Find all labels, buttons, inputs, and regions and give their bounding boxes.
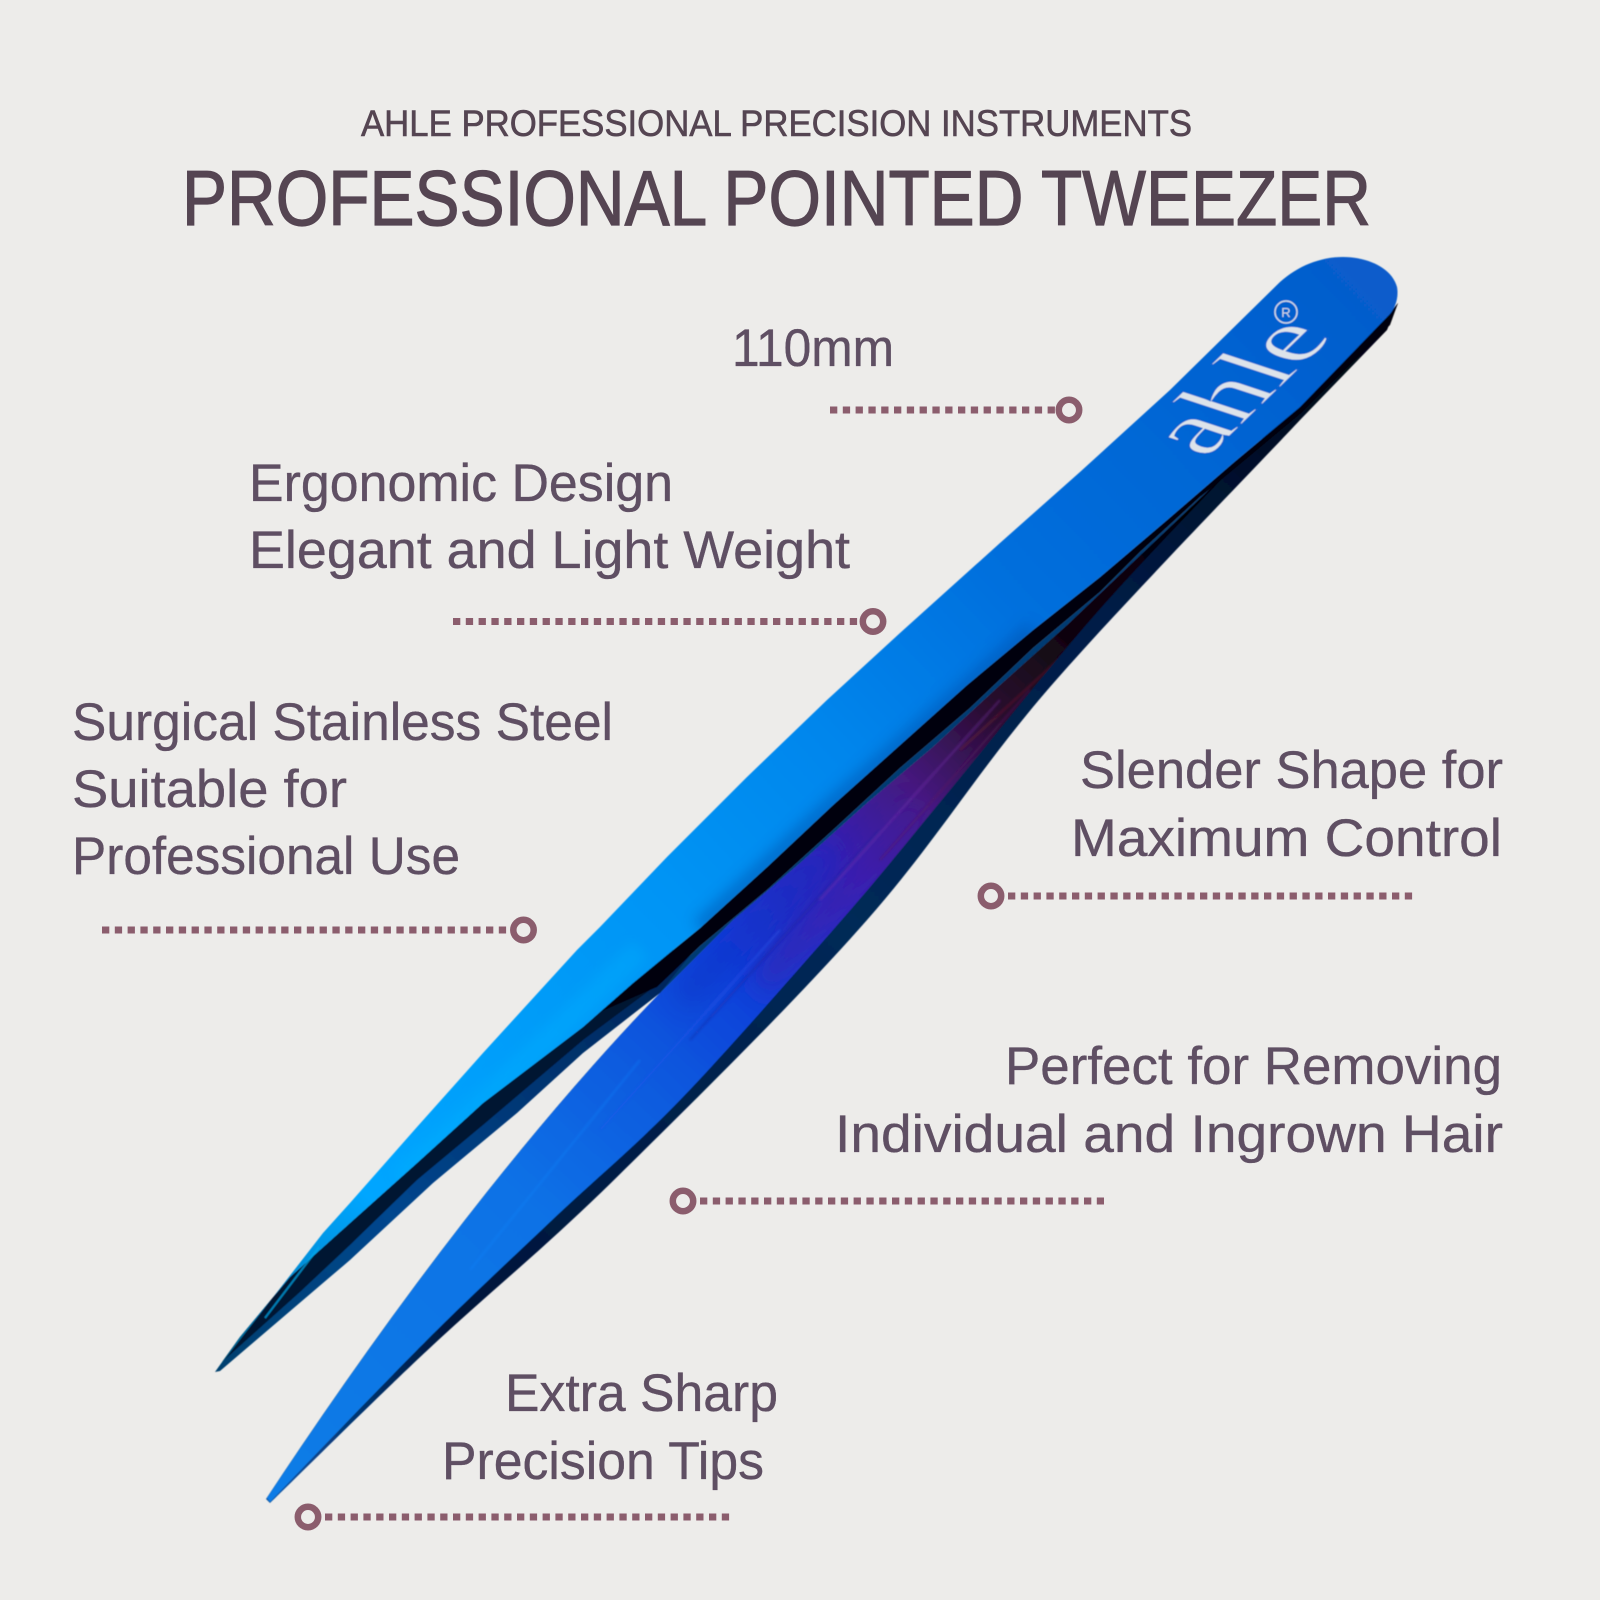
iridescent shading and brushed streaks on lower arm — [586, 646, 1068, 1129]
marker — [298, 1507, 318, 1527]
leader line — [325, 1514, 730, 1520]
marker — [513, 920, 534, 940]
upper arm underside — [215, 943, 700, 1372]
teal tip highlight — [265, 1247, 319, 1318]
marker — [1059, 400, 1079, 420]
leader line — [700, 1198, 1104, 1204]
leader line — [830, 406, 1058, 414]
label line 2: Elegant and Light Weight — [249, 521, 850, 580]
infographic canvas — [74, 110, 1502, 1530]
title: PROFESSIONAL POINTED TWEEZER — [182, 154, 1371, 242]
label: 110mm — [732, 319, 894, 378]
callout: ergonomic design — [249, 454, 883, 632]
marker — [673, 1191, 693, 1211]
registered mark: R — [1281, 305, 1291, 320]
lower arm outer edge — [266, 303, 1398, 1503]
leader line — [102, 926, 512, 934]
registered mark — [1275, 301, 1297, 323]
label line 2: Maximum Control — [1071, 809, 1502, 868]
callout: slender shape — [981, 741, 1503, 906]
label line 2: Precision Tips — [442, 1432, 764, 1491]
callout: perfect for removing — [673, 1037, 1503, 1211]
marker — [981, 886, 1001, 906]
black shadow band — [600, 303, 1398, 1012]
ahle logo: ahle — [1117, 305, 1356, 466]
upper arm face — [215, 257, 1398, 1372]
dark stripe on underside — [222, 943, 700, 1362]
callout: extra sharp — [298, 1364, 778, 1527]
label line 2: Suitable for — [72, 760, 347, 819]
blue stripe between arms — [657, 467, 1233, 993]
marker — [863, 611, 883, 632]
label: Extra Sharp — [505, 1364, 778, 1423]
label: Surgical Stainless Steel — [72, 693, 613, 752]
eyebrow heading: AHLE PROFESSIONAL PRECISION INSTRUMENTS — [361, 103, 1192, 144]
face shading — [604, 624, 1040, 1010]
label: Slender Shape for — [1080, 741, 1503, 800]
callout: 110mm — [732, 319, 1079, 420]
callout: surgical stainless steel — [72, 693, 613, 940]
leader line — [1008, 892, 1413, 900]
tweezer illustration — [215, 257, 1398, 1503]
label: Ergonomic Design — [249, 454, 673, 513]
lower arm face — [267, 467, 1233, 1502]
leader line — [453, 618, 862, 625]
label: Perfect for Removing — [1005, 1037, 1502, 1096]
label line 3: Professional Use — [72, 827, 460, 886]
label line 2: Individual and Ingrown Hair — [835, 1105, 1503, 1164]
header — [182, 103, 1371, 242]
